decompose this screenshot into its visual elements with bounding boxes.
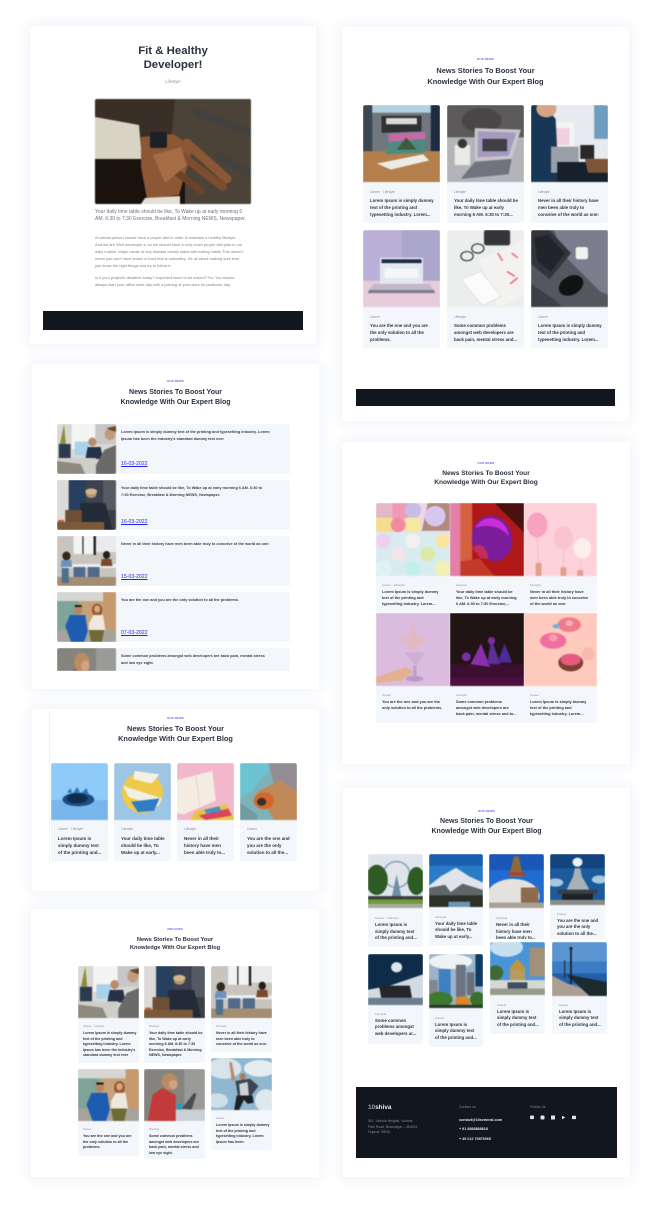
card 4: Career [382,693,391,697]
card 1: Lorem Ipsum is [58,836,91,840]
card 4 (clipped) [550,854,605,939]
card 4: You are the one and you are [83,1134,132,1138]
card 4: You are the one and [247,836,290,840]
eyebrow tag: ARCHIVES [167,927,183,931]
list item 5 (cut off) [57,648,290,671]
card 6: Lorem Ipsum is [435,1022,467,1027]
card 6 [531,230,608,348]
body paragraph 1: And we are Web developer s, so we should have a very much proper diet plan in our [95,242,242,247]
card 3 (clipped): history have men [496,929,532,934]
list item 4: 07-03-2022 [121,630,148,636]
panel: masonry layout [31,909,319,1177]
heading: Knowledge With Our Expert Blog [130,945,220,951]
card 5: Lifestyle [149,1127,159,1131]
card 1: typesetting industry. Lorem... [370,212,430,216]
card 1: Lorem Ipsum is simply dummy [83,1031,136,1035]
heading [434,470,538,486]
card 6: typesetting industry. Lorem... [538,336,598,342]
card 2: Lifestyle [121,827,133,831]
heading: News Stories To Boost Your [436,66,535,75]
list item 1: Ipsum has been the industry's standard dummy text ever [121,436,224,440]
body paragraph 1: A normal person should have a proper diet in order to maintain a healthy lifestyle. [95,235,236,240]
card 5: amongst web developers are [454,330,514,334]
card 2: Your daily time table should be [456,590,513,594]
intro paragraph [95,209,246,222]
card 1: Lorem Ipsum is [375,922,407,927]
heading [432,818,542,835]
card 1: text of the printing and [382,596,424,600]
address: 901, Victoria Heights, Victoria [368,1119,412,1123]
list item 1: 16-03-2022 [121,461,148,467]
card 3 (clipped) [489,854,544,939]
card 1: Career · Lifestyle [382,583,405,587]
card 2: Exercise, Breakfast & Morning [149,1048,202,1052]
title: Fit & Healthy [138,45,208,57]
card 1: Ipsum has been the industry's [83,1048,135,1052]
card 5: Lifestyle [375,1012,386,1016]
card 4: You are the one and you are the [382,700,440,704]
card 4 (clipped): you are the only [557,924,590,929]
card 6: Lorem Ipsum is simply dummy [538,322,602,328]
card 4: Career [370,314,380,318]
card 2: should be like, To [121,843,159,848]
card 5: Lifestyle [456,693,467,697]
card 7: Lorem Ipsum is [497,1009,529,1014]
card 4 [78,1069,139,1156]
panel: four-column layout [32,709,319,891]
card 4 (clipped): solution to all the... [557,931,597,936]
card 6: text of the printing and [538,330,585,334]
card 2: morning 6 AM. 6:30 to 7:30... [454,212,513,216]
card 2: like, To Wake up at early morning [456,596,517,600]
body paragraph 1: you know the right things and try to follow it. [95,263,171,268]
panel: joined three-column grid [342,442,630,764]
card 2: Your daily time table [435,921,477,926]
card 6: typesetting industry. Lorem [216,1134,264,1138]
list item 2 [57,480,290,530]
card 6: Lorem Ipsum is simply dummy [216,1123,269,1127]
card 6: typesetting industry. Lorem... [530,712,584,716]
card 3: conceive of the world as one: [216,1042,267,1046]
footer strip [43,311,303,330]
card 2: Wake up at early... [435,934,472,939]
list item 1: Lorem Ipsum is simply dummy text of the printing and typesetting industry. Lorem [121,430,270,434]
card 3: men been able truly to conceive [530,596,588,600]
list item 4: You are the one and you are the only solution to all the problems. [121,598,239,602]
card 1: Career · Lifestyle [58,827,83,831]
card 4 (clipped): Career [557,912,566,916]
list item 3: Never in all their history have men been able truly to conceive of the world as one: [121,542,270,546]
card 5 [447,230,524,348]
card 4: the only solution to all the [370,330,424,334]
card 1: of the printing and... [375,935,417,940]
card 1: of the printing and... [58,850,101,855]
body paragraph 2: always start your office work day with a planing of your work for particular day. [95,282,231,287]
card 1: simply dummy text [375,929,414,934]
card 1 [363,105,440,223]
card 1: Career · Lifestyle [375,916,399,920]
contact details: + 49 212 70875065 [459,1137,491,1141]
heading: Knowledge With Our Expert Blog [432,828,542,835]
list item 4 [57,592,290,642]
card 1 [78,966,139,1063]
card 5: Lifestyle [454,314,466,318]
card 1 [51,763,108,861]
card 6: Career [435,1016,444,1020]
heading [118,724,233,743]
card 2: Your daily time table should be [149,1031,203,1035]
social icons [530,1116,576,1120]
card 2: morning 6 AM. 6:30 to 7:30 [149,1042,195,1046]
card 8 [552,942,607,1034]
card 2: Lifestyle [149,1024,159,1028]
card 3: Lifestyle [216,1024,226,1028]
card 2: Your daily time table should be [454,198,518,202]
card 5: amongst web developers are [456,706,509,710]
card 4: problems. [370,336,391,342]
eyebrow tag: OUR NEWS [478,461,494,465]
list item 2: Your daily time table should be like, To Wake up at early morning 6 AM. 6:30 to [121,486,262,490]
category label: Lifestyle [165,79,181,84]
card 3: Never in all their history have [216,1031,267,1035]
card 2: Wake up at early... [121,850,160,855]
card 5: Some common problems [149,1134,192,1138]
card 2: Lifestyle [454,190,466,194]
card 1 [376,503,450,612]
card 5 [368,954,423,1044]
card 4 [376,613,450,723]
panel: article detail [30,26,316,344]
card 3 [177,763,234,861]
logo: 10shiva [368,1104,391,1111]
card 5: web developers ar... [375,1031,416,1036]
card 2: like, To Wake up at early [149,1037,191,1041]
heading [130,937,220,951]
follow heading: Follow Us [530,1105,545,1109]
card 2: NEWS, Newspaper. [149,1053,182,1057]
card 3: Never in all their history have [530,590,584,594]
heading: Knowledge With Our Expert Blog [427,76,544,86]
card 5: back pain, mental stress and [149,1145,199,1149]
eyebrow tag: OUR NEWS [478,809,495,813]
heading: Knowledge With Our Expert Blog [120,399,230,406]
intro paragraph: Your daily time table should be like, To Wake up at early morning 6 [95,209,242,215]
heading: News Stories To Boost Your [127,724,224,733]
card 3: Never in all their [184,836,219,840]
card 3: Lifestyle [184,827,196,831]
contact details [459,1118,502,1141]
card 1: Career · Lifestyle [370,190,395,194]
contact details: + 91 8888888818 [459,1127,488,1131]
card 6 [524,613,597,723]
card 5: low eye sight. [149,1151,173,1155]
address: Gujarat, INDIA [368,1130,390,1134]
list item 3 [57,536,290,586]
card 7 [490,942,545,1034]
heading: News Stories To Boost Your [129,389,222,396]
address [368,1119,418,1134]
heading: Knowledge With Our Expert Blog [434,479,538,486]
eyebrow tag: OUR NEWS [477,57,494,61]
card 1: Career · Lifestyle [83,1024,104,1028]
card 6: Career [530,693,539,697]
card 6 [429,954,483,1047]
card 4 [240,763,297,861]
card 2: 6 AM. 6:30 to 7:30 Exercise,... [456,602,509,606]
panel: three-column grid with footer [342,27,629,421]
footer strip [356,389,615,406]
card 1: typesetting industry. Lorem [83,1042,131,1046]
card 3: Lifestyle [530,583,541,587]
card 3 (clipped): Never in all their [496,922,530,927]
card 5 [450,613,524,723]
card 5: Some common [375,1018,406,1023]
list item 2: 16-03-2022 [121,519,148,525]
card 4 (clipped): You are the one and [557,918,598,923]
photo: wrist watch [94,98,252,205]
card 4: Career [83,1127,92,1131]
card 1: Lorem Ipsum is simply dummy [382,590,438,594]
body paragraph 1: daily routine. Major cause of any disease mostly starts with eating habits This doesn't [95,249,243,254]
card 3: conceive of the world as one: [538,212,599,216]
card 1: Lorem Ipsum is simply dummy [370,198,434,202]
contact details: contact@10seminal.com [459,1118,502,1122]
card 3: Lifestyle [538,190,550,194]
card 2: Your daily time table [121,836,165,840]
body paragraph 2: Is it your project's deadline today? Important issue to be solved? So, You should [95,275,234,280]
body paragraph 1 [95,235,244,268]
card 1: text of the printing and [370,204,417,210]
card 4 [363,230,440,348]
panel: list layout [32,364,319,689]
card 5: amongst web developers are [149,1140,199,1144]
card 2 [144,966,205,1063]
card 7: of the printing and... [497,1022,539,1027]
card 3: of the world as one: [530,602,566,606]
heading: News Stories To Boost Your [442,470,530,476]
list item 1 [57,424,290,474]
card 5: problems amongst [375,1024,414,1029]
card 3: history have men [184,843,221,848]
card 3: men been able truly to [216,1037,255,1041]
card 6: Career [538,314,548,318]
card 5 [144,1069,205,1159]
card 2 [450,503,524,612]
card 3 [524,503,597,612]
card 2: like, To Wake up at early [454,204,504,210]
card 8: simply dummy text [559,1015,598,1020]
card 6: of the printing and... [435,1035,477,1040]
list item 5 (cut off): and low eye sight. [121,660,154,664]
heading [427,66,544,86]
card 6 [211,1058,272,1150]
card 6: Lorem Ipsum is simply dummy [530,700,586,704]
card 6: Ipsum has been. [216,1140,245,1144]
heading: News Stories To Boost Your [137,937,213,943]
body paragraph 2 [95,275,234,287]
card 2 [114,763,171,861]
card 5: Some common problems [454,322,506,328]
card 4: problems. [83,1145,100,1149]
list item 5 (cut off): Some common problems amongst web developers are back pain, mental stress [121,654,265,658]
card 3: Never in all their history have [538,198,599,202]
card 3: men been able truly to [538,204,584,210]
card 5: Some common problems [456,700,502,704]
card 4: the only solution to all the [83,1140,128,1144]
card 1 [368,854,423,947]
card 6: text of the printing and [530,706,572,710]
card 6: text of the printing and [216,1129,255,1133]
list item 3: 15-03-2022 [121,574,148,580]
card 1: standard dummy text ever [83,1053,128,1057]
card 8: Lorem Ipsum is [559,1009,591,1014]
card 7: simply dummy text [497,1015,536,1020]
eyebrow tag: OUR NEWS [167,716,184,720]
list item 2: 7:30 Exercise, Breakfast & Morning NEWS, Newspaper. [121,492,220,496]
eyebrow tag: OUR NEWS [167,379,184,383]
card 2: Lifestyle [435,914,446,918]
site footer [356,1087,617,1158]
body paragraph 1: mean you can't have snack or food that is unhealthy. It's all about making sure that [95,256,239,261]
card 4: only solution to all the problems. [382,706,442,710]
card 8: Career [559,1002,568,1006]
card 1: simply dummy text [58,843,99,848]
heading: Knowledge With Our Expert Blog [118,734,233,743]
heading: News Stories To Boost Your [440,818,533,825]
card 2: should be like, To [435,927,471,932]
card 7: Career [497,1002,506,1006]
card 3 [531,105,608,223]
card 3: been able truly to... [184,850,225,855]
card 4: solution to all the... [247,850,288,855]
card 5: back pain, mental stress and... [454,336,517,342]
address: Park Road, Bhavnagar – 364001, [368,1125,418,1129]
card 3 (clipped): Lifestyle [496,916,507,920]
card 4: You are the one and you are [370,322,428,328]
panel: travel masonry with footer [343,788,630,1177]
card 6: simply dummy text [435,1028,474,1033]
card 5: back pain, mental stress and to... [456,712,516,716]
card 4: Career [247,827,257,831]
contact heading: Contact us [459,1105,476,1109]
card 1: typesetting industry. Lorem... [382,602,436,606]
card 6: Career [216,1116,225,1120]
card 4: you are the only [247,843,282,848]
title: Developer! [144,59,202,71]
card 2: Lifestyle [456,583,467,587]
card 8: of the printing and... [559,1022,601,1027]
card 1: text of the printing and [83,1037,122,1041]
heading [120,388,230,406]
card 3 [211,966,272,1052]
title [138,45,208,71]
card 2 [447,105,524,223]
card 2 [429,854,483,946]
intro paragraph: AM. 6:30 to 7:30 Exercise, Breakfast & Morning NEWS, Newspaper. [95,216,246,222]
